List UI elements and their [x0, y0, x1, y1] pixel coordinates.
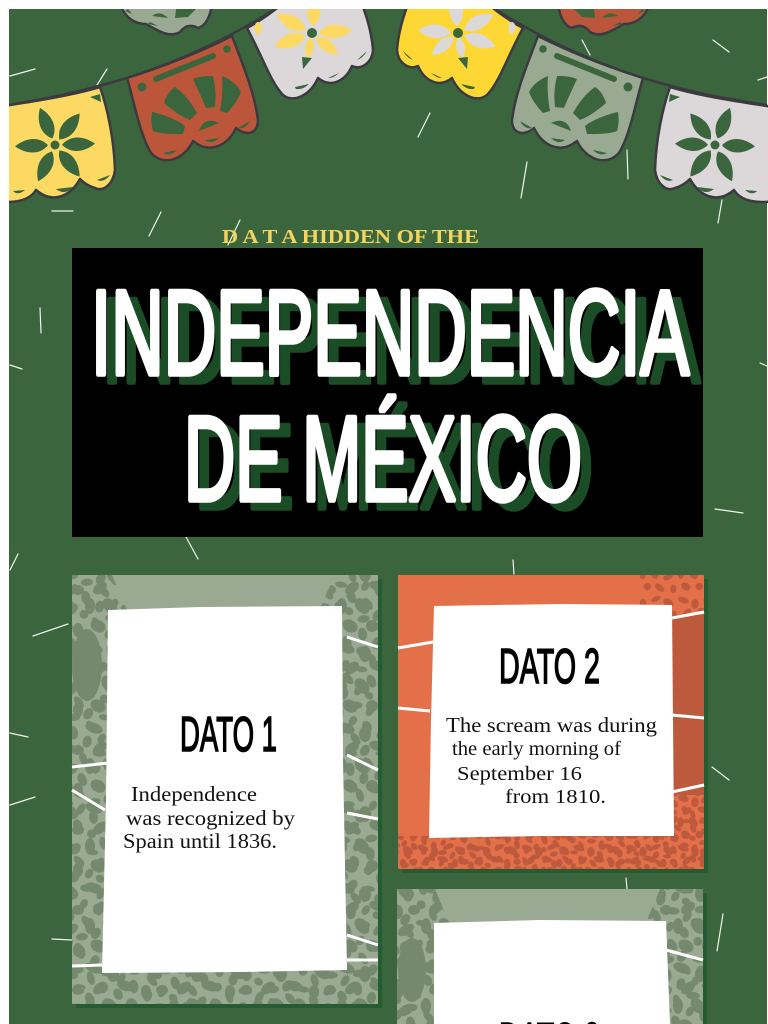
dato 2 text: the early morning of — [452, 739, 622, 760]
title — [91, 266, 689, 526]
dato 1 text — [123, 782, 296, 853]
dato 2 paper — [429, 604, 674, 838]
flag: sage fan — [512, 36, 643, 160]
dato 1 paper — [102, 606, 347, 973]
dato 1 text: Independence — [131, 782, 257, 806]
subtitle: D A T A HIDDEN OF THE — [222, 227, 479, 248]
dato 1 text: Spain until 1836. — [123, 829, 277, 853]
flag: grey flower right — [655, 87, 768, 202]
dato 1 heading: DATO 1 — [180, 708, 277, 762]
panel: dato 1 — [72, 575, 382, 1008]
dato 2 text: from 1810. — [505, 786, 606, 808]
title shadow — [102, 274, 700, 534]
dato 2 heading: DATO 2 — [499, 640, 600, 694]
bunting string — [9, 9, 767, 105]
dato 2 text: September 16 — [457, 763, 582, 785]
dato 2 text — [446, 713, 658, 808]
title panel — [72, 248, 703, 537]
dato 3 paper — [434, 920, 670, 1024]
flag: yellow flower top — [397, 0, 523, 98]
panel: dato 2 — [398, 575, 708, 873]
dato 1 text: was recognized by — [126, 806, 296, 830]
flag: grey flower top — [247, 0, 373, 98]
flag: yellow flower left — [0, 87, 115, 202]
flag: red fan — [127, 36, 258, 160]
dato 2 text: The scream was during — [446, 713, 658, 737]
panel: dato 3 — [397, 889, 707, 1024]
papel picado: small top flags — [120, 4, 650, 34]
